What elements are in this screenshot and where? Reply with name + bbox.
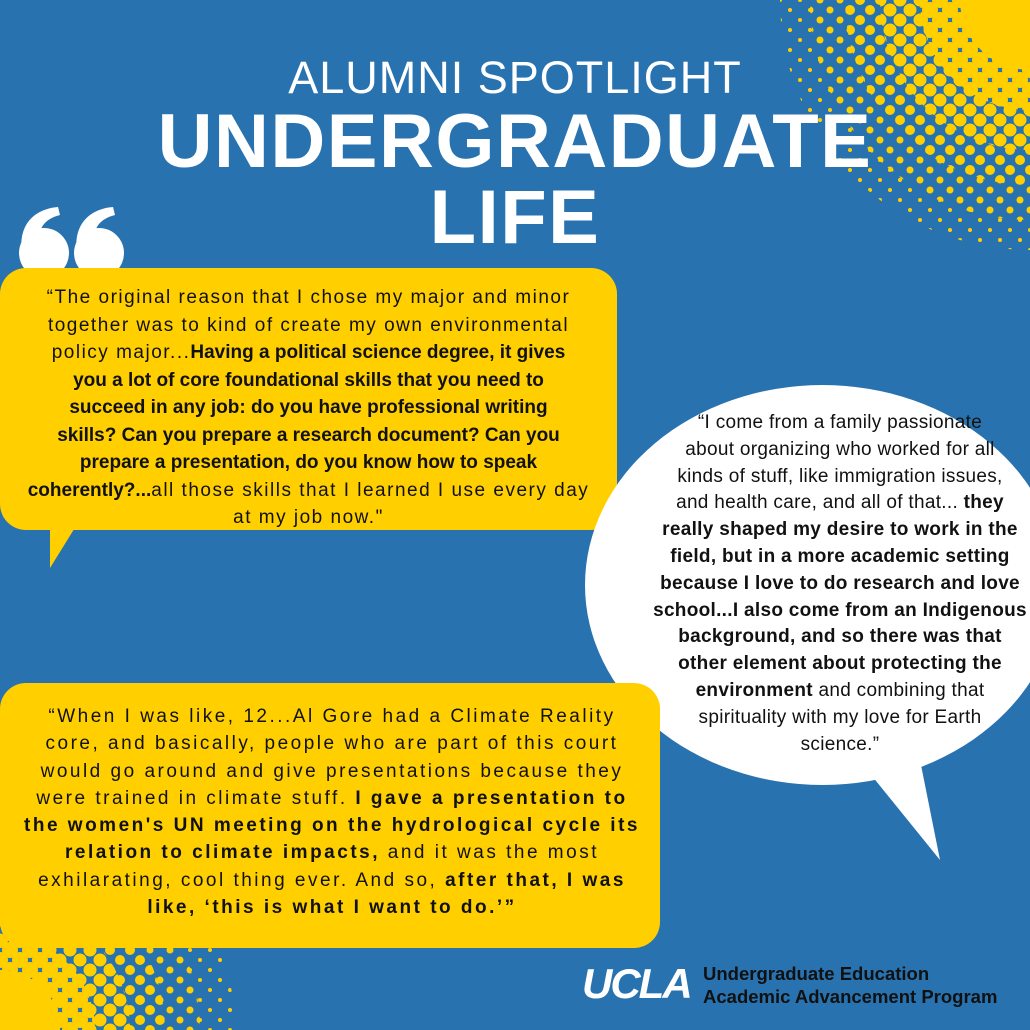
logo: UCLA: Undergraduate Education (703, 963, 929, 984)
quote box 3: like, ‘this is what I want to do.’” (147, 897, 517, 918)
speech bubble: white: science.” (801, 734, 879, 755)
quote box 3: the women's UN meeting on the hydrological cycle its (24, 815, 640, 836)
quote box 1: together was to kind of create my own environmental (48, 314, 569, 336)
quote box 1: “The original reason that I chose my major and minor (47, 287, 570, 308)
speech bubble: white: because I love to do research and love (660, 573, 1020, 594)
speech bubble: white: kinds of stuff, like immigration issues, (677, 466, 1003, 487)
speech bubble: white: background, and so there was that (678, 626, 1002, 647)
logo: UCLA: Academic Advancement Program (703, 986, 997, 1007)
speech bubble: white: other element about protecting the (678, 653, 1002, 674)
quote box 3 (0, 683, 660, 948)
title (158, 99, 872, 260)
speech bubble: white: about organizing who worked for all (685, 439, 995, 460)
logo: UCLA: UCLA (582, 960, 691, 1007)
quote box 1: at my job now." (233, 507, 384, 528)
subtitle: ALUMNI SPOTLIGHT (288, 52, 742, 103)
speech bubble: white: field, but in a more academic setting (670, 546, 1010, 567)
quote box 3: would go around and give presentations because they (41, 761, 623, 782)
speech bubble: white: “I come from a family passionate (698, 412, 982, 433)
quote box 1 (0, 268, 617, 530)
quote box 3: were trained in climate stuff. I gave a presentation to (36, 788, 628, 809)
title: UNDERGRADUATE (158, 99, 872, 184)
quote box 1: succeed in any job: do you have professional writing (69, 397, 548, 418)
speech bubble: white: and health care, and all of that... they (676, 492, 1004, 513)
logo: UCLA (582, 960, 997, 1007)
quote box 3: “When I was like, 12...Al Gore had a Climate Reality (48, 706, 616, 727)
tail white (875, 766, 940, 860)
quote box 1: you a lot of core foundational skills that you need to (73, 370, 544, 390)
quote box 3: relation to climate impacts, and it was the most (65, 842, 599, 863)
icon: quote marks (19, 207, 124, 268)
tail 1 (50, 526, 76, 568)
quote box 1: policy major...Having a political science degree, it gives (52, 342, 565, 363)
speech bubble: white: really shaped my desire to work in the (662, 519, 1018, 540)
quote box 3: core, and basically, people who are part of this court (46, 733, 618, 754)
speech bubble: white (585, 385, 1030, 860)
speech bubble: white: spirituality with my love for Earth (699, 707, 981, 728)
speech bubble: white: school...I also come from an Indigenous (653, 600, 1027, 621)
quote box 3: exhilarating, cool thing ever. And so, after that, I was (38, 870, 626, 891)
quote box 1: skills? Can you prepare a research document? Can you (57, 424, 560, 446)
title: LIFE (430, 175, 600, 260)
quote box 1: coherently?...all those skills that I learned I use every day (28, 480, 589, 500)
quote box 1: prepare a presentation, do you know how to speak (80, 452, 537, 473)
speech bubble: white: environment and combining that (696, 680, 984, 701)
